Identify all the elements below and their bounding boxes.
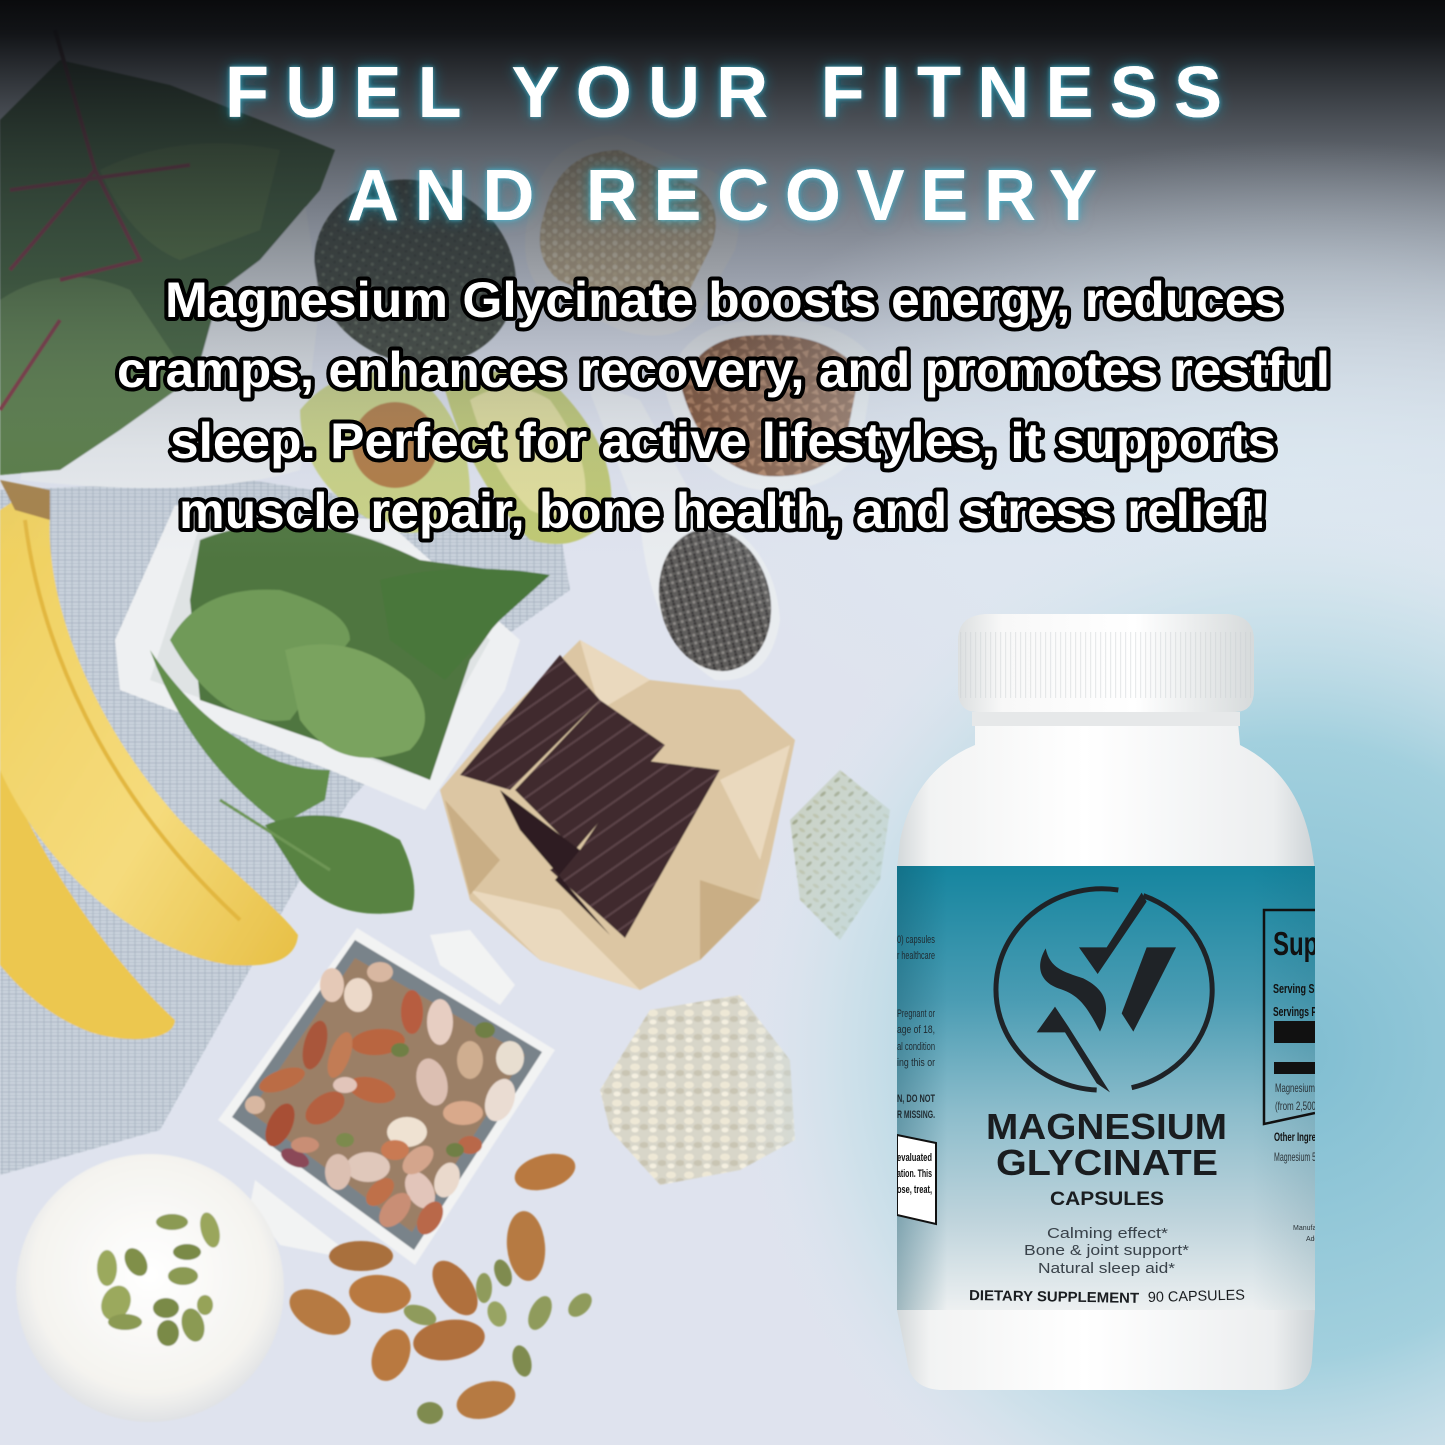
chia spoon	[585, 380, 786, 683]
body paragraph: cramps, enhances recovery, and promotes restful	[117, 342, 1330, 398]
FDA disclaimer box: ose, treat,	[897, 1184, 932, 1196]
dietary supplement line	[970, 1290, 1244, 1303]
product benefits: Natural sleep aid*	[1038, 1260, 1175, 1277]
bananas	[0, 480, 298, 1039]
supplement facts panel: (from 2,500	[1275, 1099, 1316, 1113]
spinach dish	[115, 505, 550, 914]
quinoa bowl	[525, 135, 739, 336]
dietary supplement line: DIETARY SUPPLEMENT	[969, 1288, 1139, 1307]
FDA disclaimer box: ation. This	[897, 1168, 932, 1180]
supplement facts panel: Other Ingre	[1274, 1130, 1316, 1144]
beans dish	[218, 928, 555, 1265]
product name: GLYCINATE	[996, 1142, 1218, 1183]
left side directions text: 0) capsules	[897, 934, 935, 946]
buckwheat bowl	[665, 320, 875, 490]
supplement facts panel: Serving Si	[1273, 981, 1317, 996]
supplement facts panel: Manufact	[1293, 1225, 1322, 1232]
body paragraph: Magnesium Glycinate boosts energy, reduces	[165, 272, 1282, 328]
body paragraph: sleep. Perfect for active lifestyles, it supports	[170, 413, 1276, 469]
title: FUEL YOUR FITNESS	[225, 53, 1222, 133]
almonds and pumpkin seeds	[282, 1148, 596, 1425]
left side directions text: N, DO NOT	[897, 1093, 935, 1105]
product name	[988, 1114, 1224, 1205]
bottle cap	[958, 614, 1254, 726]
body paragraph	[117, 272, 1330, 539]
label printing	[897, 889, 1333, 1307]
FDA disclaimer box: evaluated	[897, 1152, 932, 1164]
left side directions text: Pregnant or	[897, 1008, 935, 1020]
bottle body	[897, 722, 1315, 1390]
dietary supplement line: 90 CAPSULES	[1148, 1287, 1245, 1306]
dark chocolate	[460, 655, 720, 938]
product benefits: Bone & joint support*	[1024, 1242, 1189, 1259]
supplement facts panel: Magnesium 5	[1274, 1150, 1316, 1164]
left side directions text: ing this or	[897, 1057, 935, 1069]
parchment paper	[440, 640, 795, 990]
whole avocado	[284, 147, 546, 397]
avocado halves	[300, 371, 611, 544]
yogurt bowl	[16, 1154, 284, 1422]
label panel	[897, 866, 1315, 1310]
supplement facts panel: Add	[1306, 1236, 1319, 1243]
title	[225, 53, 1222, 236]
supplement facts panel: Supp	[1273, 925, 1333, 962]
title: AND RECOVERY	[347, 156, 1097, 236]
product benefits	[1024, 1225, 1189, 1277]
left side directions text: R MISSING.	[897, 1109, 935, 1121]
seeds scatter	[790, 770, 890, 940]
chard leaves	[0, 30, 335, 475]
product bottle	[897, 614, 1333, 1390]
supplement facts panel	[1262, 908, 1315, 1241]
food photo: flat lay of magnesium-rich foods	[0, 30, 890, 1425]
body paragraph: muscle repair, bone health, and stress relief!	[179, 483, 1267, 539]
oats	[600, 995, 795, 1185]
brand logo	[996, 889, 1212, 1092]
left side directions text: r healthcare	[897, 950, 935, 962]
product name: CAPSULES	[1050, 1189, 1164, 1210]
supplement facts panel: Servings P	[1273, 1004, 1317, 1019]
left side directions text	[897, 934, 935, 1121]
left side directions text: al condition	[897, 1041, 935, 1053]
FDA disclaimer box	[897, 1135, 936, 1224]
teal glow behind bottle	[700, 480, 1445, 1445]
left side directions text: age of 18,	[897, 1024, 935, 1036]
white plate under greens	[20, 170, 320, 488]
right side light wash	[680, 140, 1445, 800]
top dark gradient overlay	[0, 0, 1445, 560]
cloth napkin	[0, 480, 570, 1175]
supplement facts panel: Magnesium	[1275, 1081, 1315, 1095]
product name: MAGNESIUM	[986, 1106, 1227, 1147]
product benefits: Calming effect*	[1047, 1225, 1168, 1242]
